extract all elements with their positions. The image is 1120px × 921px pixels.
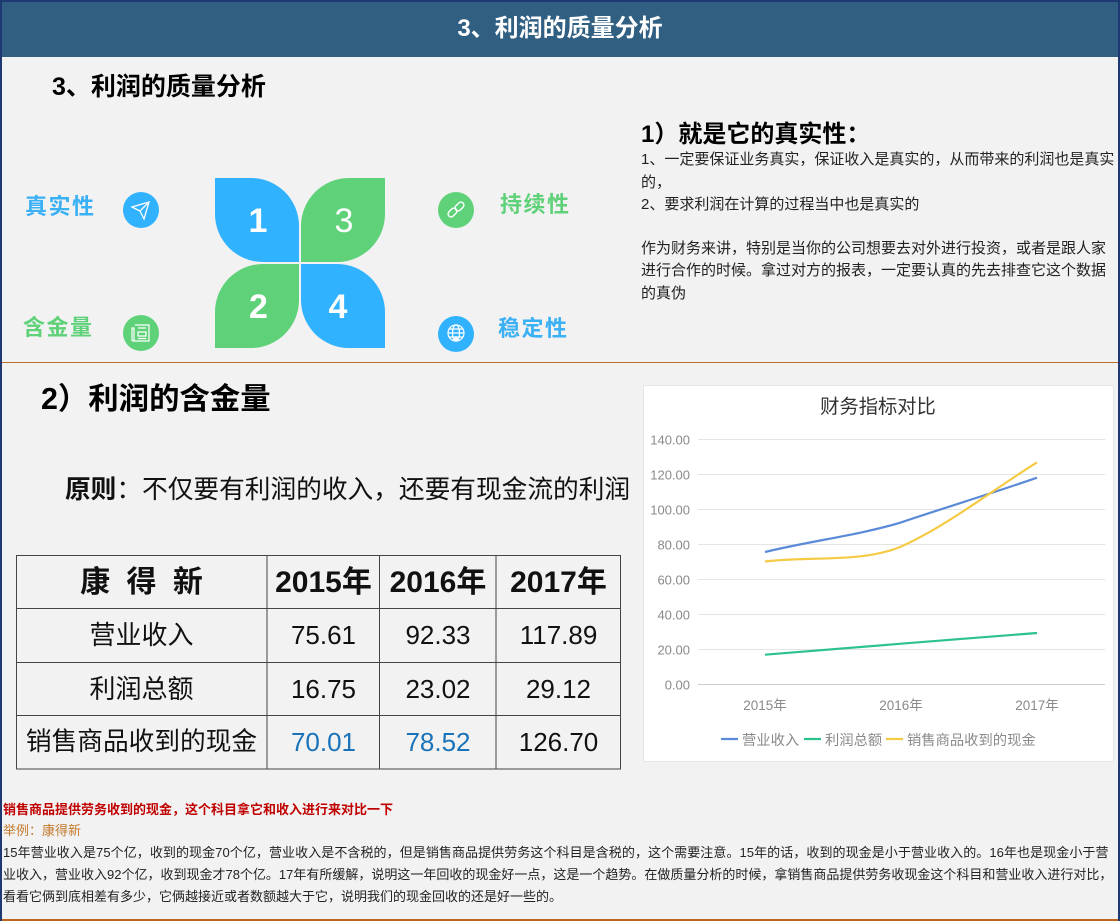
principle statement: 原则：不仅要有利润的收入，还要有现金流的利润 — [65, 476, 630, 504]
y axis labels: 120.00 — [650, 468, 690, 482]
leaf 2: 2 — [249, 288, 268, 326]
legend: 利润总额 — [825, 732, 882, 749]
paragraph line 3: 的真伪 — [641, 285, 686, 302]
table header: 2016年 — [390, 566, 486, 599]
icon: chain link — [438, 192, 474, 228]
label: 含金量: 含金量 — [23, 315, 94, 340]
divider — [2, 362, 1118, 363]
row: 销售商品收到的现金: 70.01 — [291, 727, 356, 757]
commentary line 1: 15年营业收入是75个亿，收到的现金70个亿，营业收入是不含税的，但是销售商品提供劳务这个科目是含税的，这个需要注意。15年的话，收到的现金是小于营业收入的。16年也是现金小于营 — [3, 845, 1109, 860]
y axis labels — [650, 432, 690, 692]
point 2: 2、要求利润在计算的过程当中也是真实的 — [641, 196, 919, 213]
table grid — [16, 555, 621, 770]
y axis labels: 0.00 — [665, 678, 690, 692]
point 1 line 2: 的， — [641, 174, 671, 191]
legend — [721, 732, 1036, 749]
commentary line 3: 看看它俩到底相差有多少，它俩越接近或者数额越大于它，说明我们的现金回收的还是好一些的。 — [3, 889, 562, 904]
table header — [80, 566, 607, 599]
row: 营业收入: 营业收入 — [89, 620, 194, 650]
panel: example commentary — [3, 802, 1112, 904]
row: 利润总额: 29.12 — [526, 674, 591, 704]
y axis labels: 80.00 — [657, 538, 690, 552]
y axis labels: 140.00 — [650, 432, 690, 448]
section heading: 3、利润的质量分析 — [52, 73, 266, 101]
commentary line 2: 业收入，营业收入92个亿，收到现金才78个亿。17年有所缓解，说明这一年回收的现金好一点，这是一个趋势。在做质量分析的时候，拿销售商品提供劳务收现金这个科目和营业收入进行对比， — [3, 867, 1112, 882]
row: 利润总额: 16.75 — [291, 674, 356, 704]
y axis labels: 40.00 — [657, 608, 690, 622]
row: 销售商品收到的现金: 126.70 — [519, 727, 598, 757]
heading: 利润的含金量: 2）利润的含金量 — [41, 382, 271, 416]
row: 营业收入: 75.61 — [291, 620, 356, 650]
red note: 销售商品提供劳务收到的现金，这个科目拿它和收入进行来对比一下 — [3, 802, 393, 817]
row: 利润总额 — [89, 674, 591, 704]
paragraph line 2: 进行合作的时候。拿过对方的报表，一定要认真的先去排查它这个数据 — [641, 262, 1106, 279]
leaf 1 — [215, 178, 299, 262]
panel: authenticity text — [641, 121, 1114, 302]
row: 营业收入: 117.89 — [520, 620, 597, 650]
leaf 4 — [301, 264, 385, 348]
icon: newspaper — [123, 315, 159, 351]
y axis labels: 100.00 — [650, 502, 690, 518]
x axis labels: 2017年 — [1015, 698, 1059, 713]
paragraph line 1: 作为财务来讲，特别是当你的公司想要去对外进行投资，或者是跟人家 — [641, 240, 1106, 257]
example label: 举例：康得新 — [3, 823, 81, 838]
icon: paper plane — [123, 192, 159, 228]
leaf 1: 1 — [249, 202, 267, 240]
y axis labels: 60.00 — [657, 572, 690, 588]
icon: globe — [438, 316, 474, 352]
heading: 1）就是它的真实性： — [641, 121, 870, 148]
series: 营业收入 — [765, 478, 1037, 552]
series: 利润总额 — [765, 633, 1037, 655]
leaf 4: 4 — [329, 288, 347, 326]
row: 销售商品收到的现金: 销售商品收到的现金 — [26, 728, 257, 756]
table: 康得新 — [16, 555, 621, 770]
row: 营业收入: 92.33 — [405, 620, 471, 650]
legend: 销售商品收到的现金 — [907, 732, 1036, 749]
y axis labels: 20.00 — [657, 642, 690, 658]
line chart: 财务指标对比 — [643, 385, 1114, 762]
banner title: 3、利润的质量分析 — [457, 15, 663, 42]
table header: 2015年 — [275, 566, 372, 599]
series: 销售商品收到的现金 — [765, 462, 1037, 562]
chart title: 财务指标对比 — [820, 396, 936, 418]
divider — [2, 919, 1118, 921]
label: 持续性: 持续性 — [500, 192, 571, 217]
x axis labels: 2015年 — [743, 698, 787, 713]
label: 稳定性: 稳定性 — [498, 316, 569, 341]
x axis labels — [743, 698, 1059, 713]
panel: four-leaf diagram — [215, 178, 385, 348]
x axis labels: 2016年 — [879, 698, 923, 713]
table header: 2017年 — [510, 566, 607, 599]
row: 利润总额: 23.02 — [405, 674, 471, 704]
row: 营业收入 — [89, 620, 597, 650]
legend: 营业收入 — [742, 732, 799, 749]
row: 销售商品收到的现金: 78.52 — [405, 727, 471, 757]
header banner — [2, 2, 1118, 57]
leaf 2 — [215, 264, 299, 348]
table header: 康 得 新 — [80, 566, 203, 599]
point 1 line 1: 1、一定要保证业务真实，保证收入是真实的，从而带来的利润也是真实 — [641, 151, 1114, 168]
label: 真实性: 真实性 — [25, 194, 96, 219]
leaf 3 — [301, 178, 385, 262]
row: 销售商品收到的现金 — [26, 727, 598, 757]
row: 利润总额: 利润总额 — [89, 674, 194, 704]
leaf 3: 3 — [335, 202, 353, 240]
